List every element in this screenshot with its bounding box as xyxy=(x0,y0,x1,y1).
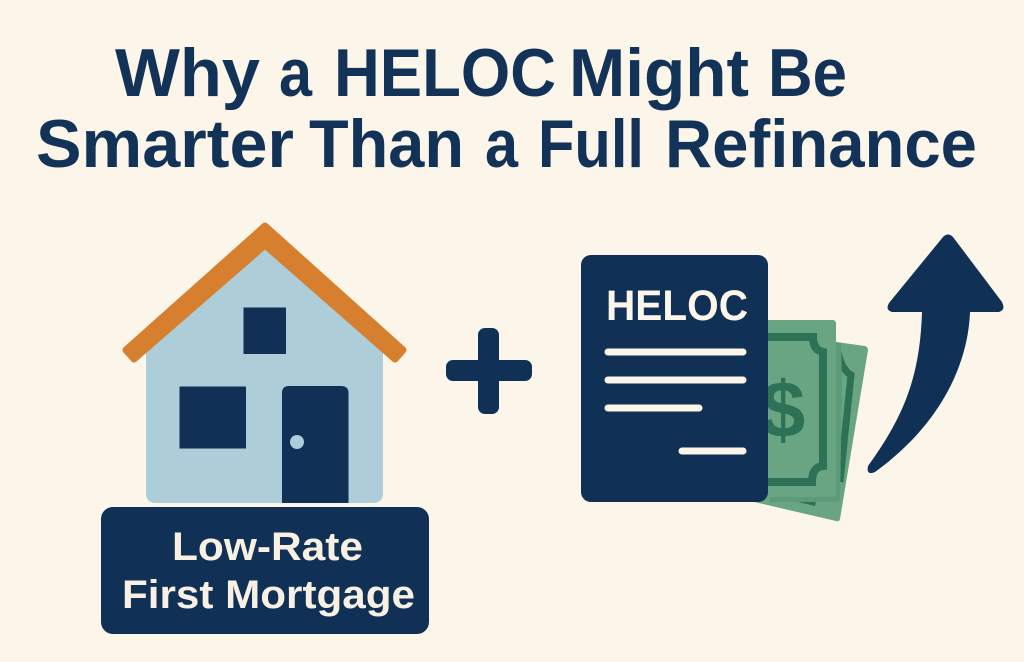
icon: upward arrow xyxy=(868,234,1003,473)
title: Might xyxy=(569,35,749,111)
back bill xyxy=(750,342,868,521)
door xyxy=(282,386,348,503)
title: a xyxy=(485,106,519,182)
upper window xyxy=(244,308,286,354)
title: Refinance xyxy=(665,106,977,182)
door knob xyxy=(290,435,304,449)
icon: money bills xyxy=(745,320,868,521)
title: Smarter xyxy=(36,106,294,182)
document heading: HELOC xyxy=(606,282,748,330)
label: low-rate first mortgage: Low-Rate xyxy=(172,525,363,569)
house roof xyxy=(126,226,403,359)
title: Be xyxy=(768,35,847,111)
back bill lower border xyxy=(777,497,817,506)
title: Than xyxy=(309,106,464,182)
middle bill edge xyxy=(770,342,842,502)
icon: HELOC document xyxy=(581,255,768,502)
dollar sign: $ xyxy=(761,365,805,454)
bill inner border xyxy=(760,337,823,482)
title: HELOC xyxy=(334,35,556,111)
icon: plus sign xyxy=(446,328,532,414)
left window xyxy=(180,386,246,448)
document lines xyxy=(608,352,743,451)
back bill border xyxy=(838,352,851,482)
label: low-rate first mortgage xyxy=(101,507,429,634)
title: a xyxy=(279,35,313,111)
title: Full xyxy=(538,106,644,182)
icon: house xyxy=(126,226,403,503)
label: low-rate first mortgage: First Mortgage xyxy=(122,573,415,617)
title xyxy=(36,35,977,182)
house body xyxy=(146,240,383,503)
front bill xyxy=(745,320,836,497)
title: Why xyxy=(115,35,260,111)
